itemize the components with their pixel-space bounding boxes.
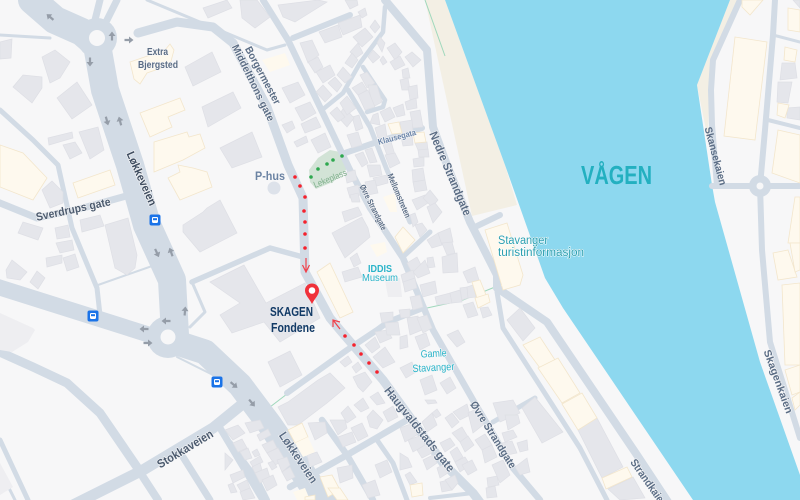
red dotted route from Haugvaldstads gate [343, 334, 379, 374]
label: Extra Bjergsted: Bjergsted [138, 59, 178, 71]
icon: bus stop Løkkeveien [150, 214, 160, 226]
water: Vågen [445, 0, 800, 500]
label: Stavanger turistinformasjon: Stavanger [498, 235, 548, 247]
Skansekaien road [711, 0, 740, 186]
label: Middelthons gate: Middelthons gate [229, 43, 277, 124]
label: Løkkeveien south: Løkkeveien [276, 429, 321, 486]
label: Gamle Stavanger [411, 347, 455, 375]
label: Gamle Stavanger: Gamle [420, 347, 447, 361]
label: Løkkeveien north: Løkkeveien [124, 150, 158, 208]
lower-left block [225, 425, 245, 440]
label: Haugvaldstads gate: Haugvaldstads gate [381, 384, 458, 475]
roundabouts [77, 18, 771, 358]
red dotted route from P-hus [293, 175, 307, 250]
label: P-hus: P-hus [255, 169, 285, 183]
label: Lekeplass: Lekeplass [312, 167, 349, 190]
footpaths [270, 0, 495, 407]
lower-middle block [425, 400, 437, 404]
icon: location pin [305, 284, 319, 304]
label: Stavanger turistinformasjon [498, 235, 584, 259]
P-hus marker circle [268, 182, 280, 194]
label: SKAGEN Fondene: SKAGEN [270, 305, 313, 319]
Middelthons gate road [138, 22, 482, 500]
arrow: route from Haugvaldstads gate [333, 320, 340, 329]
main Løkkeveien road [32, 0, 175, 335]
label: Borgermester: Borgermester [242, 45, 283, 107]
sand quay [425, 0, 738, 216]
west curve road [0, 350, 137, 467]
Skagenkaien road [760, 0, 800, 438]
label: Stavanger turistinformasjon: turistinformasjon [498, 247, 584, 259]
traffic direction arrows [44, 11, 258, 409]
park: Lekeplass [309, 150, 348, 189]
Nedre Strandgate road [385, 0, 670, 500]
Stokkaveien road [73, 402, 245, 500]
label: Stokkaveien: Stokkaveien [154, 427, 216, 471]
label: Sverdrups gate: Sverdrups gate [35, 196, 112, 224]
branch to Øvre [497, 292, 607, 500]
central block [332, 217, 370, 258]
icon: bus stop south [212, 376, 222, 388]
label: IDDIS Museum: Museum [362, 272, 398, 284]
minor roads [0, 0, 540, 500]
upper-middle block [278, 0, 327, 22]
label: IDDIS Museum [362, 263, 398, 284]
arrow: route from P-hus [302, 258, 310, 272]
Sverdrups gate road [0, 195, 130, 218]
label: Extra Bjergsted: Extra [147, 46, 168, 58]
label: Extra Bjergsted [138, 46, 178, 71]
icon: bus stop west [88, 310, 98, 322]
label: SKAGEN Fondene: Fondene [271, 321, 315, 335]
label: Nedre Strandgate: Nedre Strandgate [426, 129, 475, 218]
label: SKAGEN Fondene [270, 305, 315, 335]
label: Klausegata: Klausegata [377, 127, 417, 147]
green dotted path [309, 154, 344, 179]
label: Mellomstreten: Mellomstreten [385, 172, 413, 219]
pale land areas [0, 278, 402, 495]
label: Skagenkaien: Skagenkaien [761, 348, 795, 415]
label: Gamle Stavanger: Stavanger [412, 361, 455, 375]
label: Skansekaien: Skansekaien [702, 126, 729, 187]
label: Vågen: VÅGEN [581, 160, 652, 190]
label: IDDIS Museum: IDDIS [368, 263, 392, 275]
label: Øvre Strandgate upper: Øvre Strandgate [358, 183, 389, 232]
label: Øvre Strandgate lower: Øvre Strandgate [467, 399, 518, 471]
